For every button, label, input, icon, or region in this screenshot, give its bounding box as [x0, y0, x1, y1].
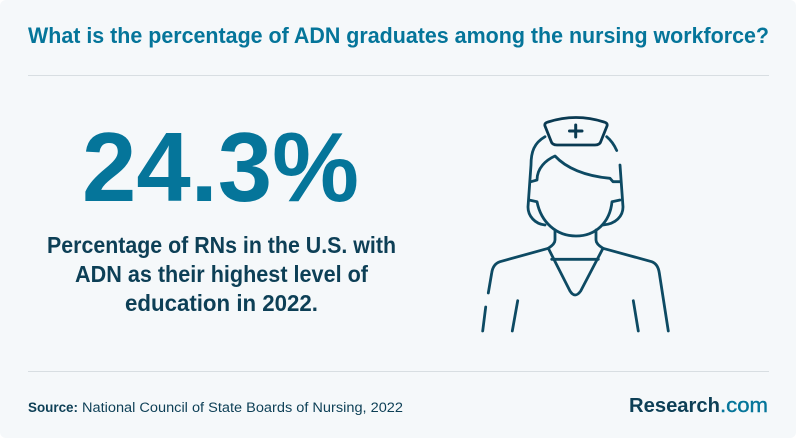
logo: [629, 394, 768, 417]
icon: nurse cap: [545, 118, 607, 145]
neck: [548, 230, 555, 248]
description text: education in 2022.: [125, 290, 318, 316]
icon: nurse: [483, 118, 668, 331]
hair: [528, 137, 545, 225]
body: [488, 248, 548, 293]
description text: Percentage of RNs in the U.S. with: [47, 232, 396, 258]
description text: ADN as their highest level of: [75, 261, 368, 287]
face: [529, 200, 620, 236]
big statistic: 24.3%: [82, 112, 359, 222]
source: National Council of State Boards of Nursing, 2022: [82, 400, 403, 415]
source: Source:: [28, 400, 78, 415]
description text: [47, 232, 396, 316]
logo: .com: [720, 394, 768, 417]
logo: Research: [629, 394, 720, 417]
title: What is the percentage of ADN graduates among the nursing workforce?: [28, 23, 769, 48]
